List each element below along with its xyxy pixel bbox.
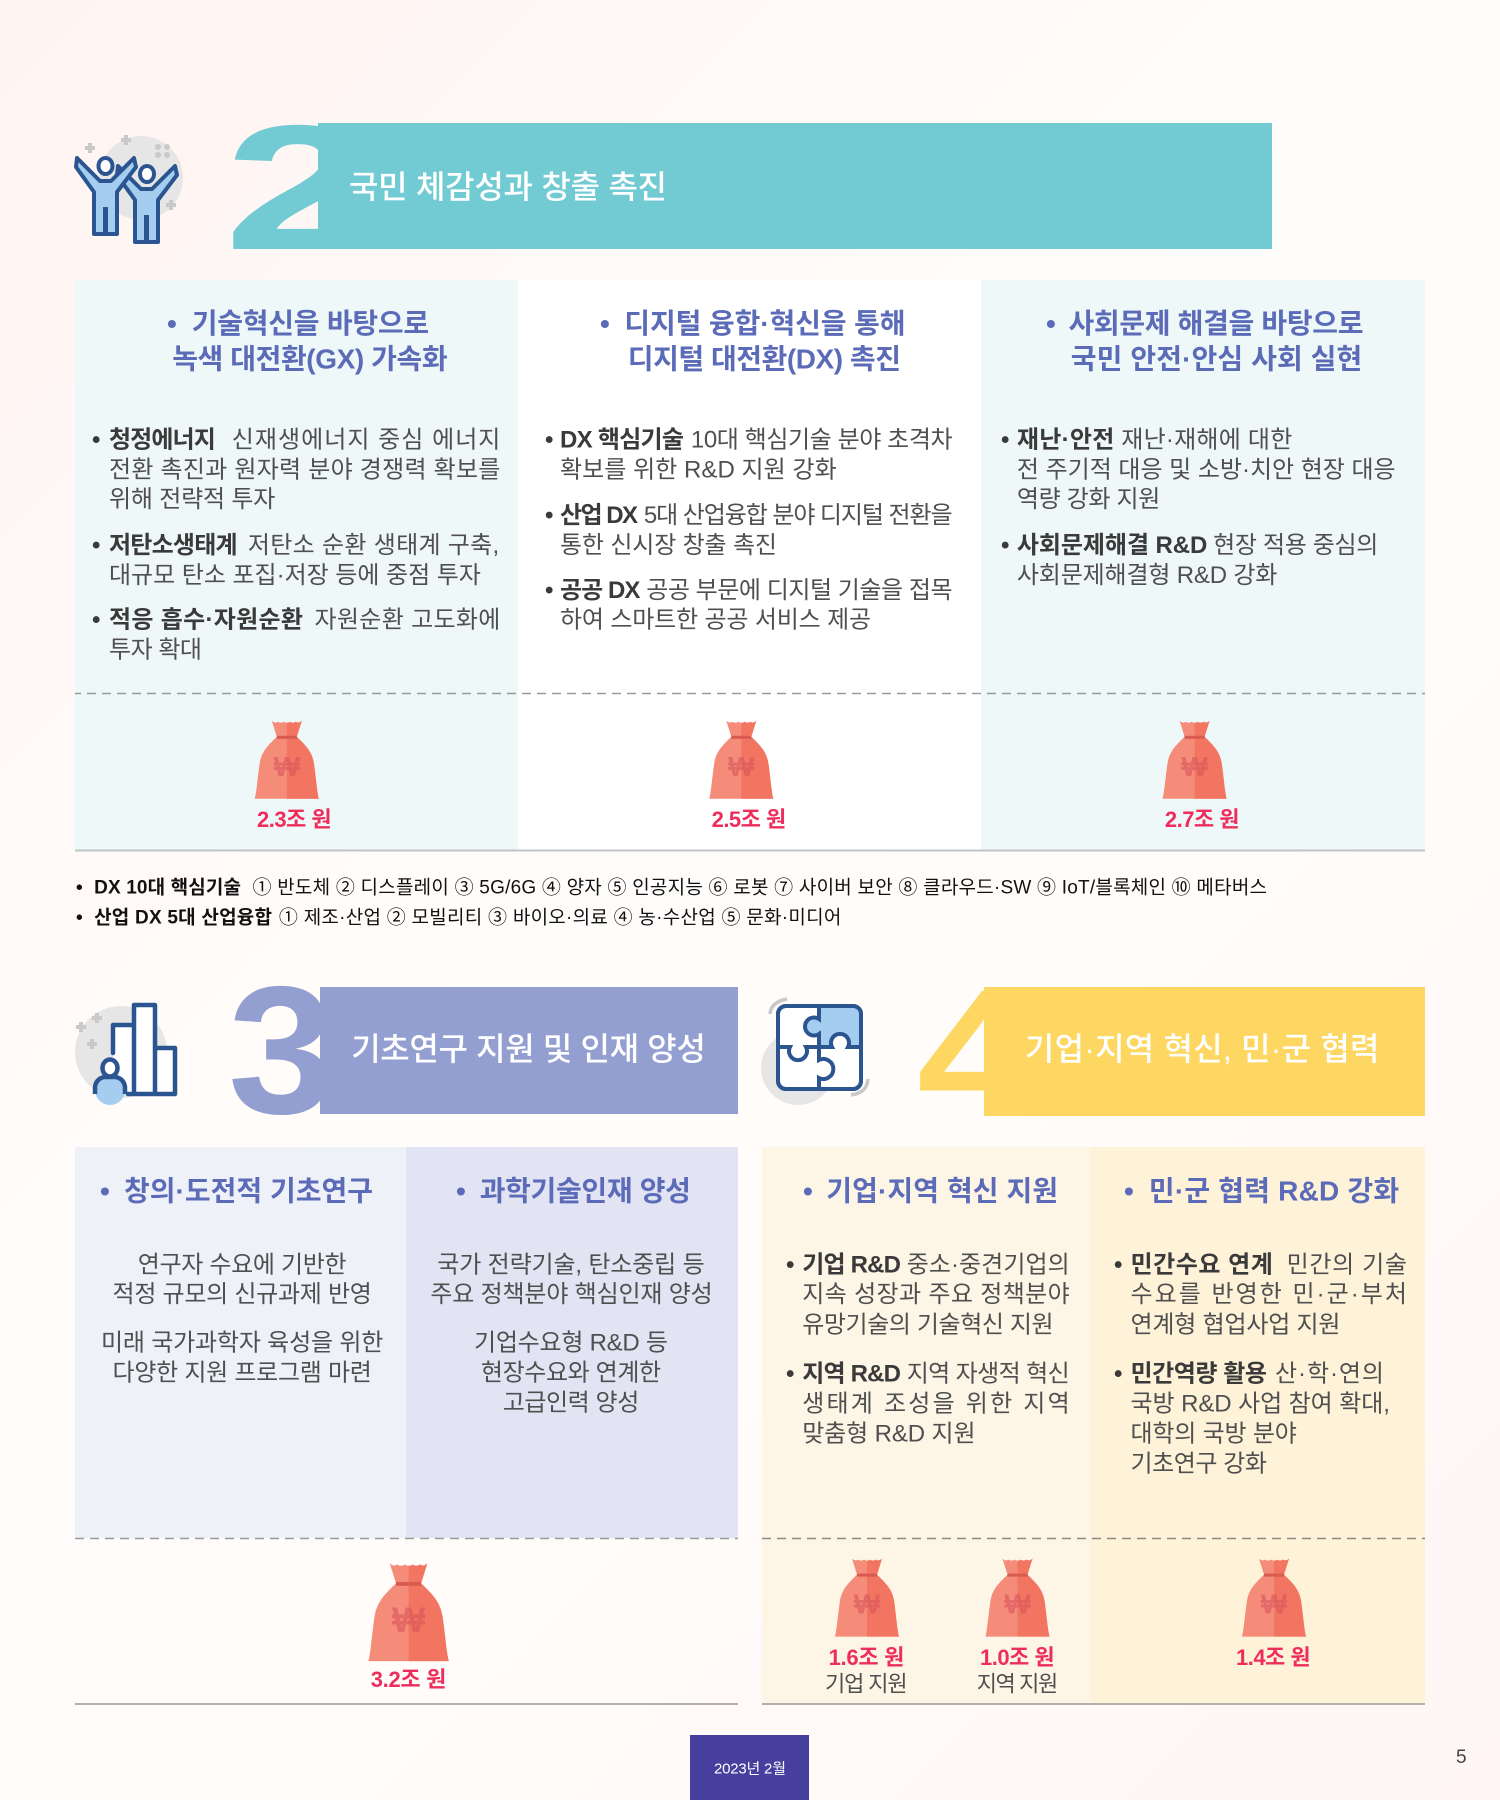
body text: 공공 DX [560,577,640,604]
icon: money bag [1163,721,1227,799]
body text: 사회문제해결형 R&D 강화 [1017,562,1277,589]
body text: 민간의 기술 [1287,1252,1407,1278]
heading: • [456,1176,466,1206]
numeral 4: 4 [917,952,1035,1155]
section 2 header [76,89,1272,287]
banner title: 국민 체감성과 창출 촉진 [349,169,667,205]
body text: 청정에너지 [109,426,216,454]
body text: 통한 신시장 창출 촉진 [560,532,777,559]
body text: 대학의 국방 분야 [1130,1420,1297,1447]
body text: 맞춤형 R&D 지원 [802,1420,976,1447]
icon: two people cheering [76,135,183,242]
body text: 생태계 조성을 위한 지역 [802,1390,1070,1418]
heading: 기업·지역 혁신 지원 [826,1176,1058,1206]
heading: 기술혁신을 바탕으로 [192,308,429,339]
body text: • [92,607,100,634]
panel background [1091,1147,1425,1704]
body text: 연구자 수요에 기반한 [138,1252,347,1278]
amount: enterprise: 1.6조 원 [829,1645,904,1670]
heading: 녹색 대전환(GX) 가속화 [172,344,448,374]
body text: 고급인력 양성 [503,1389,639,1416]
body text [92,426,500,663]
icon: money bag: ₩ [1004,1589,1031,1620]
body text: 유망기술의 기술혁신 지원 [802,1311,1054,1338]
panel: civil-military R&D [1091,1147,1425,1704]
body text: • [1114,1252,1122,1278]
body text: 사회문제해결 R&D [1017,532,1207,559]
footnotes: DX and industry lists: ① 제조·산업 ② 모빌리티 ③ 바이오·의료 ④ 농·수산업 ⑤ 문화·미디어 [279,906,841,928]
heading: • [1124,1176,1134,1206]
icon: money bag: ₩ [728,751,755,782]
banner title: 기업·지역 혁신, 민·군 협력 [1025,1031,1380,1067]
heading: • [803,1176,813,1206]
body text: 산·학·연의 [1275,1361,1384,1388]
body text: 다양한 지원 프로그램 마련 [112,1360,372,1386]
panel: S&T talent [406,1147,738,1538]
footnotes: DX and industry lists [76,876,1267,928]
body text: • [545,577,553,604]
panel background [406,1147,738,1538]
body text: 10대 핵심기술 분야 초격차 [691,426,953,454]
body text: • [786,1252,794,1278]
icon: money bag [709,721,773,799]
body text: 적정 규모의 신규과제 반영 [112,1281,372,1308]
footnotes: DX and industry lists: • [76,878,83,898]
body text [786,1252,1070,1447]
heading: • [600,308,610,339]
body text: 자원순환 고도화에 [314,607,500,634]
panel background [762,1147,1091,1704]
body text: 저탄소생태계 [109,532,238,559]
banner: section 3 [320,987,738,1114]
body text: 저탄소 순환 생태계 구축, [248,532,499,559]
footnotes: DX and industry lists: 산업 DX 5대 산업융합 [94,906,272,928]
body text: 위해 전략적 투자 [109,486,275,513]
numeral 2: 2 [224,89,372,287]
heading [600,308,906,374]
heading: • [1046,308,1056,339]
body text: 중소·중견기업의 [907,1252,1070,1278]
heading: 국민 안전·안심 사회 실현 [1071,344,1362,374]
heading: 과학기술인재 양성 [480,1176,691,1206]
body text: • [786,1361,794,1388]
body text: 기업수요형 R&D 등 [474,1330,668,1357]
heading: 디지털 융합·혁신을 통해 [624,308,906,339]
icon: bar chart with person [75,1005,175,1105]
heading: 창의·도전적 기초연구 [124,1176,373,1206]
body text: 대규모 탄소 포집·저장 등에 중점 투자 [109,562,481,589]
body text: 산업 DX [560,502,638,529]
icon: money bag [835,1559,899,1637]
heading [1046,308,1364,374]
banner: section 2 [318,123,1272,249]
heading: • [100,1176,110,1206]
body text [1114,1252,1407,1478]
amount: 2.5조 원 [712,807,786,832]
panel background [75,1147,406,1538]
section 4 header [761,952,1425,1155]
page number: 5 [1456,1747,1467,1768]
label: regional support: 지역 지원 [977,1672,1058,1696]
body text: DX 핵심기술 [560,426,684,454]
body text: 전환 촉진과 원자력 분야 경쟁력 확보를 [109,456,500,483]
body text: • [545,426,553,454]
banner title: 기초연구 지원 및 인재 양성 [351,1031,706,1067]
body text: 전 주기적 대응 및 소방·치안 현장 대응 [1017,456,1396,483]
body text: • [92,426,100,454]
icon: money bag: ₩ [392,1601,426,1640]
amount: 1.4조 원 [1236,1645,1311,1670]
amount: 2.7조 원 [1165,807,1240,832]
icon: money bag: ₩ [1261,1589,1288,1620]
heading: 사회문제 해결을 바탕으로 [1068,308,1364,339]
panel: creative basic research [75,1147,406,1538]
body text: 수요를 반영한 민·군·부처 [1130,1281,1407,1308]
heading: • [167,308,177,339]
icon: money bag: ₩ [854,1589,881,1620]
icon: money bag: ₩ [274,751,301,782]
panel: section 2 backgrounds [75,280,1425,850]
body text: 하여 스마트한 공공 서비스 제공 [560,607,871,634]
icon: money bag [986,1559,1050,1637]
body text: 민간수요 연계 [1130,1252,1273,1278]
body text: • [1114,1361,1122,1388]
body text: 확보를 위한 R&D 지원 강화 [560,456,837,483]
banner: section 4 [984,987,1425,1116]
body text: 지역 R&D [802,1361,901,1388]
footnotes: DX and industry lists: DX 10대 핵심기술 [94,876,241,898]
body text: 공공 부문에 디지털 기술을 접목 [646,577,953,604]
body text: 역량 강화 지원 [1017,486,1160,513]
body text: 미래 국가과학자 육성을 위한 [101,1330,383,1357]
body text: 적응 흡수·자원순환 [109,607,303,634]
body text: 재난·재해에 대한 [1121,426,1292,454]
body text: 신재생에너지 중심 에너지 [232,426,500,454]
footer date tab [690,1735,809,1800]
body text: 민간역량 활용 [1130,1361,1267,1388]
label: enterprise support: 기업 지원 [825,1672,908,1696]
body text: 국방 R&D 사업 참여 확대, [1130,1390,1390,1418]
icon: puzzle [761,999,868,1105]
amount: regional: 1.0조 원 [980,1645,1055,1670]
panel: DX column [545,308,953,832]
body text: 지역 자생적 혁신 [907,1361,1070,1388]
numeral 3: 3 [228,948,334,1152]
icon: money bag [255,721,319,799]
body text: 주요 정책분야 핵심인재 양성 [430,1281,713,1308]
heading [167,308,448,374]
footer date tab: 2023년 2월 [714,1760,786,1778]
body text: 기초연구 강화 [1130,1450,1267,1478]
section 3 header [75,948,738,1152]
panel: enterprise and regional innovation [762,1147,1091,1704]
footnotes: DX and industry lists: • [76,908,83,928]
heading: 민·군 협력 R&D 강화 [1149,1176,1399,1206]
budget: section 3 [368,1563,449,1692]
heading: 디지털 대전환(DX) 촉진 [628,344,901,374]
footnotes: DX and industry lists: ① 반도체 ② 디스플레이 ③ 5G/6G ④ 양자 ⑤ 인공지능 ⑥ 로봇 ⑦ 사이버 보안 ⑧ 클라우드·SW ⑨ IoT/블록체인 ⑩ 메타버스 [252,876,1267,898]
panel: GX column [92,308,500,832]
icon: money bag: ₩ [1181,751,1208,782]
body text [545,426,953,634]
body text: 기업 R&D [802,1252,901,1278]
body text: • [1001,532,1009,559]
amount: 2.3조 원 [257,807,332,832]
body text: • [1001,426,1009,454]
body text: • [92,532,100,559]
body text: • [545,502,553,529]
body text: 투자 확대 [109,636,202,663]
body text: 현장수요와 연계한 [481,1360,661,1386]
body text: 지속 성장과 주요 정책분야 [802,1281,1070,1308]
body text: 5대 산업융합 분야 디지털 전환을 [644,502,953,529]
body text [101,1252,383,1386]
amount: 3.2조 원 [371,1667,446,1692]
body text: 재난·안전 [1017,426,1114,454]
body text: 현장 적용 중심의 [1213,532,1378,559]
panel: social problems column [1001,308,1396,832]
body text: 국가 전략기술, 탄소중립 등 [437,1252,705,1278]
body text [1001,426,1396,589]
body text: 연계형 협업사업 지원 [1130,1311,1340,1338]
body text [430,1252,713,1416]
icon: money bag [1242,1559,1306,1637]
